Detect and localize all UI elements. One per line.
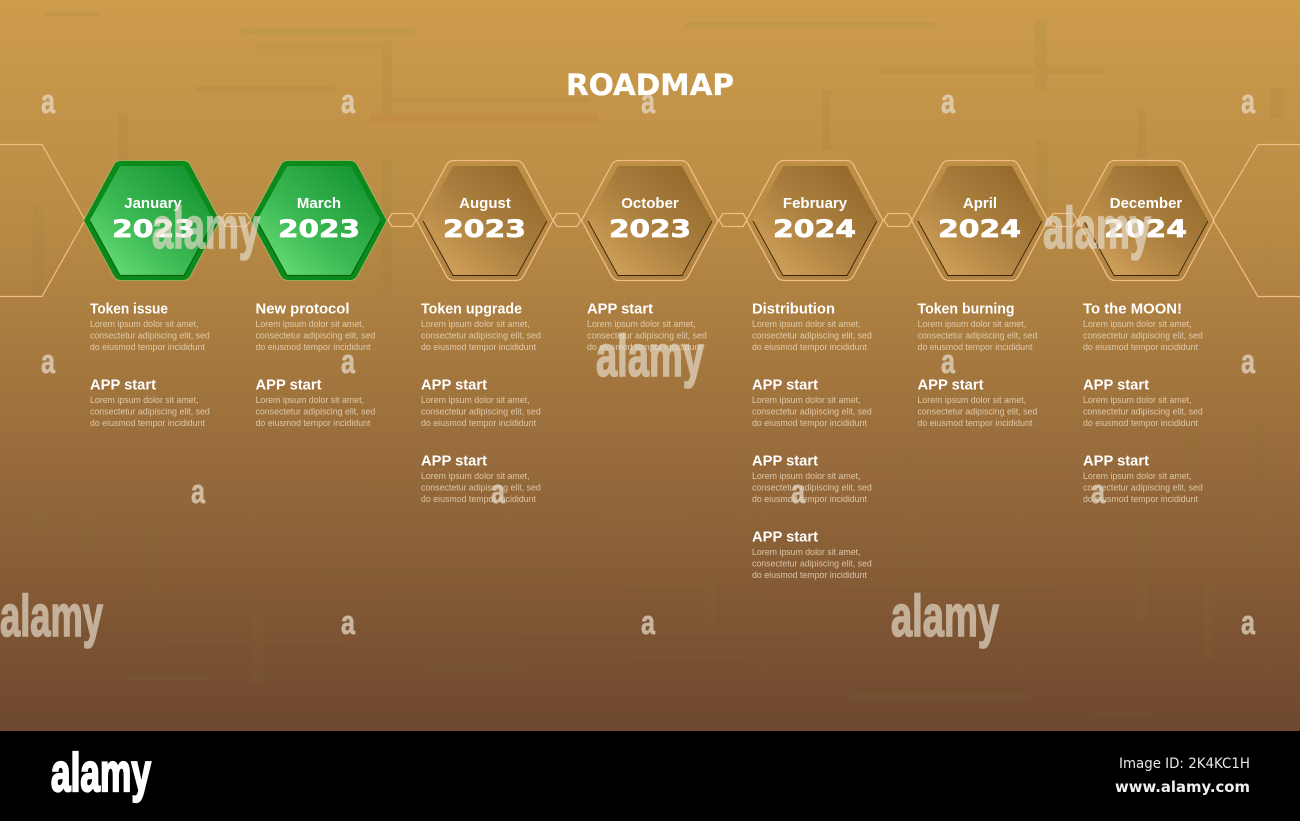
column 4 text: Lorem ipsum dolor sit amet, (587, 319, 696, 329)
column 7 text: APP start (1083, 378, 1149, 394)
column 3 text: APP start (421, 378, 487, 394)
column 5 text: do eiusmod tempor incididunt (752, 494, 867, 504)
milestone: December 2024 (1078, 160, 1214, 280)
column 6 text: APP start (918, 378, 984, 394)
column 7 text: APP start (1083, 454, 1149, 470)
column 1 text (90, 302, 210, 428)
watermarks: a (791, 473, 806, 511)
right side frame (1213, 144, 1300, 296)
column 7 text: do eiusmod tempor incididunt (1083, 342, 1198, 352)
watermarks: a (1241, 343, 1256, 381)
watermarks: a (491, 473, 506, 511)
column 2 text: New protocol (256, 302, 350, 318)
column 2 text: consectetur adipiscing elit, sed (256, 330, 375, 340)
column 3 text: Token upgrade (421, 302, 522, 318)
watermarks: a (1241, 604, 1256, 642)
milestone: August 2023: 2023 (443, 215, 526, 243)
column 3 text (421, 302, 541, 504)
milestone: February 2024: February (783, 195, 848, 212)
column 5 text: do eiusmod tempor incididunt (752, 342, 867, 352)
watermarks: a (1091, 473, 1106, 511)
watermarks: alamy (891, 584, 999, 649)
column 2 text: Lorem ipsum dolor sit amet, (256, 319, 364, 329)
watermarks: alamy (0, 584, 103, 649)
column 2 text: do eiusmod tempor incididunt (256, 418, 371, 428)
column 1 text: do eiusmod tempor incididunt (90, 418, 205, 428)
column 7 text: consectetur adipiscing elit, sed (1083, 330, 1203, 340)
watermarks: a (341, 83, 356, 121)
footer url: www.alamy.com (1115, 778, 1250, 796)
column 2 text (256, 302, 375, 428)
column 7 text: Lorem ipsum dolor sit amet, (1083, 395, 1192, 405)
watermarks: a (641, 83, 656, 121)
title: ROADMAP (566, 68, 734, 102)
watermarks: a (641, 604, 656, 642)
watermarks: a (191, 473, 206, 511)
column 7 text: To the MOON! (1083, 302, 1182, 318)
milestone: March 2023: March (297, 195, 341, 212)
column 1 text: consectetur adipiscing elit, sed (90, 406, 210, 416)
connectors (221, 214, 1077, 226)
column 2 text: do eiusmod tempor incididunt (256, 342, 371, 352)
column 5 text: Lorem ipsum dolor sit amet, (752, 471, 861, 481)
column 5 text: do eiusmod tempor incididunt (752, 418, 867, 428)
column 7 text: Lorem ipsum dolor sit amet, (1083, 471, 1192, 481)
column 7 text: consectetur adipiscing elit, sed (1083, 406, 1203, 416)
column 6 text: Lorem ipsum dolor sit amet, (918, 395, 1026, 405)
column 3 text: consectetur adipiscing elit, sed (421, 406, 541, 416)
column 5 text: consectetur adipiscing elit, sed (752, 558, 872, 568)
column 1 text: Lorem ipsum dolor sit amet, (90, 395, 199, 405)
column 6 text: Lorem ipsum dolor sit amet, (918, 319, 1026, 329)
milestone: December 2024: December (1110, 195, 1182, 212)
column 4 text: do eiusmod tempor incididunt (587, 342, 702, 352)
column 6 text: consectetur adipiscing elit, sed (918, 406, 1037, 416)
milestone: March 2023 (250, 160, 387, 280)
column 2 text: APP start (256, 378, 322, 394)
milestone: January 2023 (84, 160, 220, 280)
column 7 text: Lorem ipsum dolor sit amet, (1083, 319, 1192, 329)
milestone: January 2023: 2023 (112, 215, 195, 243)
watermarks (0, 83, 1256, 649)
milestone: January 2023: January (124, 195, 182, 212)
column 6 text (918, 302, 1037, 428)
milestone: April 2024: 2024 (938, 215, 1021, 243)
watermarks: alamy (152, 196, 260, 261)
column 3 text: Lorem ipsum dolor sit amet, (421, 471, 530, 481)
column 6 text: Token burning (918, 302, 1014, 318)
milestone: February 2024 (746, 160, 883, 280)
column 5 text: Lorem ipsum dolor sit amet, (752, 395, 861, 405)
milestone: October 2023: 2023 (609, 215, 691, 243)
column 3 text: do eiusmod tempor incididunt (421, 418, 536, 428)
column 3 text: do eiusmod tempor incididunt (421, 342, 536, 352)
column 6 text: do eiusmod tempor incididunt (918, 418, 1033, 428)
column 6 text: consectetur adipiscing elit, sed (918, 330, 1037, 340)
column 1 text: do eiusmod tempor incididunt (90, 342, 205, 352)
column 5 text: Lorem ipsum dolor sit amet, (752, 547, 861, 557)
column 5 text (752, 302, 872, 580)
column 5 text: Distribution (752, 302, 835, 318)
watermarks: alamy (1043, 196, 1151, 261)
watermarks: a (341, 604, 356, 642)
column 4 text: consectetur adipiscing elit, sed (587, 330, 707, 340)
watermarks: a (941, 343, 956, 381)
column 7 text (1083, 302, 1203, 504)
column 7 text: consectetur adipiscing elit, sed (1083, 482, 1203, 492)
image id: Image ID: 2K4KC1H (1119, 756, 1250, 772)
milestone: February 2024: 2024 (773, 215, 856, 243)
column 5 text: Lorem ipsum dolor sit amet, (752, 319, 861, 329)
milestone: April 2024: April (963, 195, 997, 212)
watermarks: alamy (596, 324, 704, 389)
milestone: August 2023 (416, 160, 553, 280)
column 5 text: APP start (752, 378, 818, 394)
column 3 text: APP start (421, 454, 487, 470)
column 6 text: do eiusmod tempor incididunt (918, 342, 1033, 352)
milestone: October 2023 (582, 160, 718, 280)
column 1 text: APP start (90, 378, 156, 394)
column 3 text: consectetur adipiscing elit, sed (421, 482, 541, 492)
column 5 text: APP start (752, 530, 818, 546)
column 3 text: do eiusmod tempor incididunt (421, 494, 536, 504)
column 5 text: consectetur adipiscing elit, sed (752, 330, 872, 340)
milestone: March 2023: 2023 (278, 215, 360, 243)
footer bar (0, 731, 1300, 821)
left side frame (0, 144, 85, 296)
milestone: April 2024 (912, 160, 1048, 280)
column 1 text: consectetur adipiscing elit, sed (90, 330, 210, 340)
column 5 text: consectetur adipiscing elit, sed (752, 406, 872, 416)
column 1 text: Token issue (90, 302, 168, 318)
column 2 text: consectetur adipiscing elit, sed (256, 406, 375, 416)
watermarks: a (1241, 83, 1256, 121)
column 5 text: APP start (752, 454, 818, 470)
column 3 text: consectetur adipiscing elit, sed (421, 330, 541, 340)
watermarks: a (341, 343, 356, 381)
column 2 text: Lorem ipsum dolor sit amet, (256, 395, 364, 405)
column 7 text: do eiusmod tempor incididunt (1083, 494, 1198, 504)
column 4 text: APP start (587, 302, 653, 318)
watermarks: a (41, 343, 56, 381)
column 5 text: consectetur adipiscing elit, sed (752, 482, 872, 492)
watermarks: a (941, 83, 956, 121)
column 3 text: Lorem ipsum dolor sit amet, (421, 395, 530, 405)
column 1 text: Lorem ipsum dolor sit amet, (90, 319, 199, 329)
column 3 text: Lorem ipsum dolor sit amet, (421, 319, 530, 329)
column 7 text: do eiusmod tempor incididunt (1083, 418, 1198, 428)
column 5 text: do eiusmod tempor incididunt (752, 570, 867, 580)
watermarks: a (41, 83, 56, 121)
column 4 text (587, 302, 707, 352)
milestone: August 2023: August (459, 195, 511, 212)
milestone: October 2023: October (621, 195, 679, 212)
milestone: December 2024: 2024 (1104, 215, 1187, 243)
footer logo: alamy (51, 743, 151, 803)
